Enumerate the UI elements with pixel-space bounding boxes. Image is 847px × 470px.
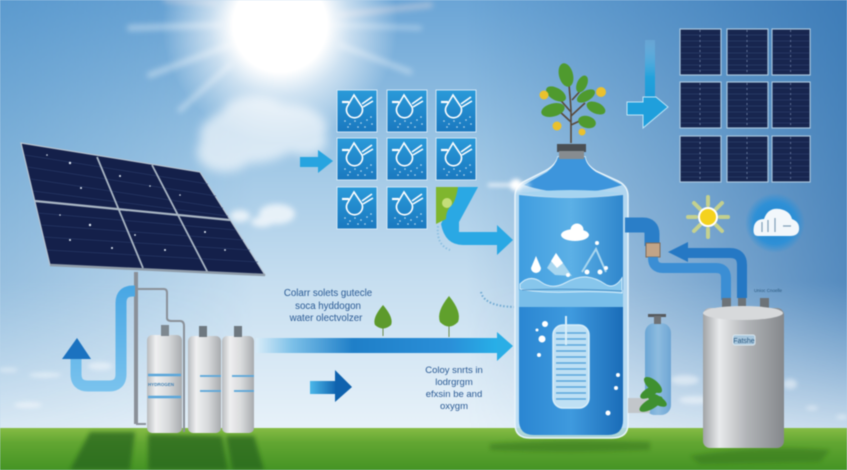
water icon tile grid [337, 90, 476, 229]
plant on neck [540, 62, 607, 143]
neck collar [557, 144, 586, 159]
vessel body [515, 157, 628, 438]
mount pole and pipes [136, 272, 184, 432]
down-right arrow [627, 40, 668, 128]
bubbles [536, 241, 620, 416]
text: electrolyzer caption: Colarr solets gutecle [284, 288, 372, 299]
side filter vessel [628, 314, 671, 415]
lower chamber [519, 307, 623, 435]
storage cylinders: HYDROGEN [148, 382, 174, 387]
tank label plate: Fatshe [733, 338, 755, 345]
text: electrolyzer caption: water olectvolzer [289, 313, 363, 324]
lens flare [488, 179, 530, 191]
waves [520, 277, 622, 293]
small leaf [374, 305, 392, 336]
grass ground [0, 428, 847, 470]
storage cylinders [147, 325, 254, 433]
electrolyzer vessel [488, 62, 628, 438]
small sun icon [688, 197, 728, 237]
small arrow to tiles [300, 150, 333, 173]
cloud icon [561, 224, 589, 241]
return arrow [668, 242, 742, 298]
outlet pipe to tank [625, 225, 726, 300]
text: electrolyzer caption: soca hyddogon [295, 301, 361, 312]
cloud data icon [745, 193, 805, 253]
left solar array [21, 143, 265, 275]
text: hydrogen and oxygen caption: oxygm [440, 401, 468, 412]
text: hydrogen and oxygen caption: efxsin be and [426, 389, 482, 400]
text: hydrogen and oxygen caption: Coloy snrts in [425, 365, 483, 376]
green tile with flow arrow [436, 187, 513, 255]
clouds [0, 96, 847, 419]
short blue arrow [310, 370, 352, 402]
tank label plate [733, 335, 755, 345]
band [519, 290, 623, 307]
curved up arrow [62, 291, 135, 386]
mountain icons [531, 249, 606, 276]
sun with rays [130, 0, 430, 143]
long flow arrow [256, 332, 513, 361]
electrode stack [553, 316, 589, 408]
large leaf [439, 296, 459, 337]
tank valve caption: Unioc Cnoelle [754, 288, 783, 293]
text: hydrogen and oxygen caption: lodrgrgm [435, 377, 473, 388]
top-right solar panels [680, 29, 810, 182]
storage tank [703, 288, 784, 448]
upper chamber [519, 195, 623, 300]
dashed flow curve [481, 292, 514, 307]
